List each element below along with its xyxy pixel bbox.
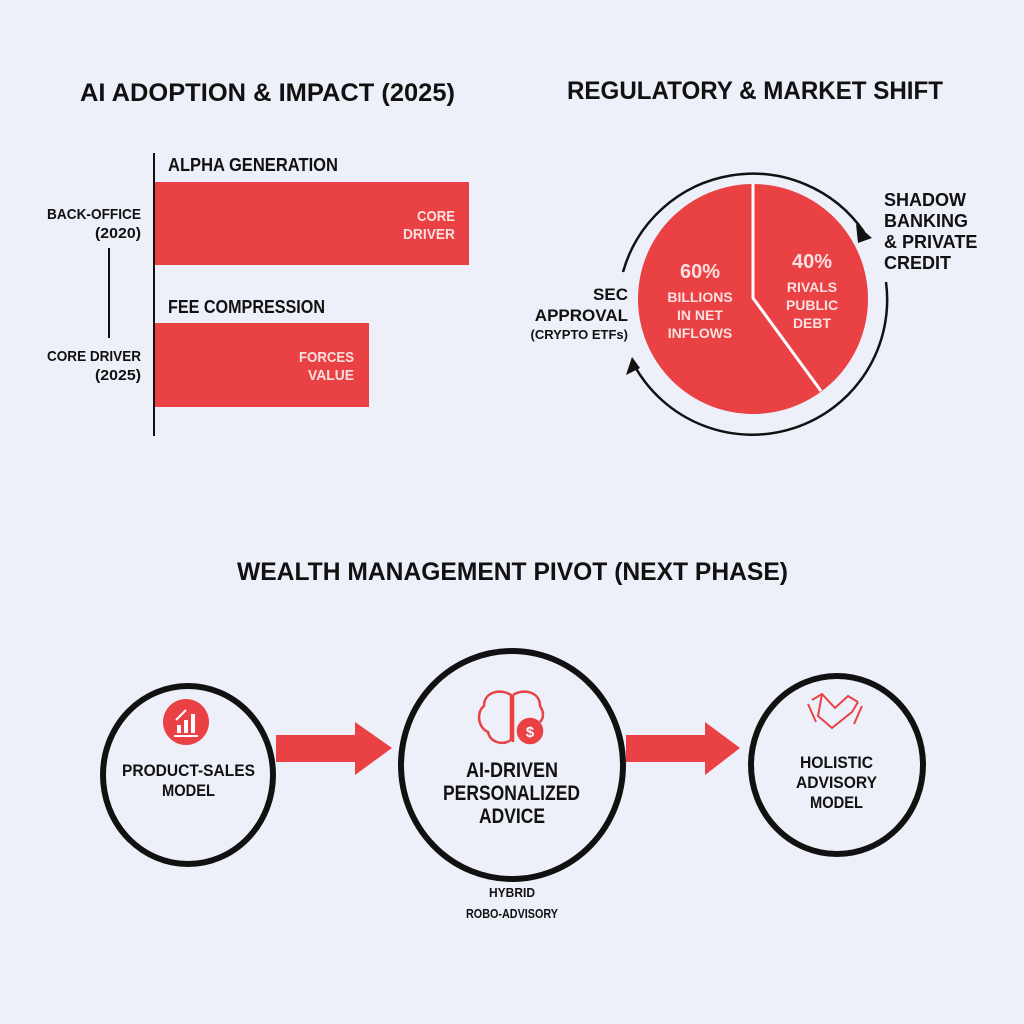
pie chart: market shift [638, 184, 868, 414]
pie label: 60%: INFLOWS [668, 325, 732, 341]
pie label: 60%: BILLIONS [667, 289, 733, 305]
label: back-office 2020: BACK-OFFICE [47, 206, 141, 223]
label: shadow banking: CREDIT [884, 253, 951, 273]
label: SEC approval: SEC [593, 285, 628, 304]
bar: alpha generation: DRIVER [403, 226, 455, 243]
circle: AI-driven advice [401, 651, 623, 879]
icon: handshake [808, 694, 862, 728]
icon: chart [163, 699, 209, 745]
circle: product-sales model: PRODUCT-SALES [122, 761, 255, 780]
bar: fee compression: VALUE [308, 367, 354, 384]
circle: holistic advisory model: MODEL [810, 793, 863, 812]
label: core driver 2025: (2025) [95, 367, 141, 384]
label: fee compression: FEE COMPRESSION [168, 297, 325, 317]
label: SEC approval: (CRYPTO ETFs) [530, 327, 628, 342]
label: shadow banking: SHADOW [884, 190, 966, 210]
label: core driver 2025: CORE DRIVER [47, 348, 141, 365]
bar chart: AI adoption [47, 153, 469, 436]
arrow 1 [276, 722, 392, 775]
circle: holistic advisory model: ADVISORY [796, 773, 878, 792]
bar: alpha generation: CORE [417, 208, 455, 225]
label: shadow banking: & PRIVATE [884, 232, 977, 252]
label: hybrid robo-advisory: HYBRID [489, 885, 535, 900]
arrow: bottom cycle [626, 282, 887, 435]
pie label: 40%: PUBLIC [786, 297, 838, 313]
title: regulatory: REGULATORY & MARKET SHIFT [567, 77, 943, 105]
icon: brain with dollar: $ [526, 724, 535, 741]
label: SEC approval: APPROVAL [535, 306, 628, 325]
arrow 2 [626, 722, 740, 775]
bar: fee compression: FORCES [299, 349, 354, 366]
label: shadow banking: BANKING [884, 211, 968, 231]
circle: product-sales model [103, 686, 273, 864]
pie label: 60%: 60% [680, 261, 720, 283]
circle: AI-driven advice: AI-DRIVEN [466, 759, 558, 782]
circle: holistic advisory model [751, 676, 923, 854]
circle: product-sales model: MODEL [162, 781, 215, 800]
bar: fee compression [155, 323, 369, 407]
icon: brain with dollar [479, 692, 543, 743]
label: alpha generation: ALPHA GENERATION [168, 155, 338, 175]
pie label: 60%: IN NET [677, 307, 723, 323]
pie label: 40%: RIVALS [787, 279, 837, 295]
circle: AI-driven advice: PERSONALIZED [443, 782, 580, 805]
bar: alpha generation [155, 182, 469, 265]
label: back-office 2020: (2020) [95, 225, 141, 242]
circle: AI-driven advice: ADVICE [479, 805, 545, 828]
title: AI adoption: AI ADOPTION & IMPACT (2025) [80, 79, 455, 107]
title: wealth management: WEALTH MANAGEMENT PIVOT (NEXT PHASE) [237, 558, 788, 586]
pie label: 40%: DEBT [793, 315, 831, 331]
label: hybrid robo-advisory: ROBO-ADVISORY [466, 906, 558, 921]
circle: holistic advisory model: HOLISTIC [800, 753, 873, 772]
arrow: top cycle [623, 174, 872, 272]
pie label: 40%: 40% [792, 251, 832, 273]
